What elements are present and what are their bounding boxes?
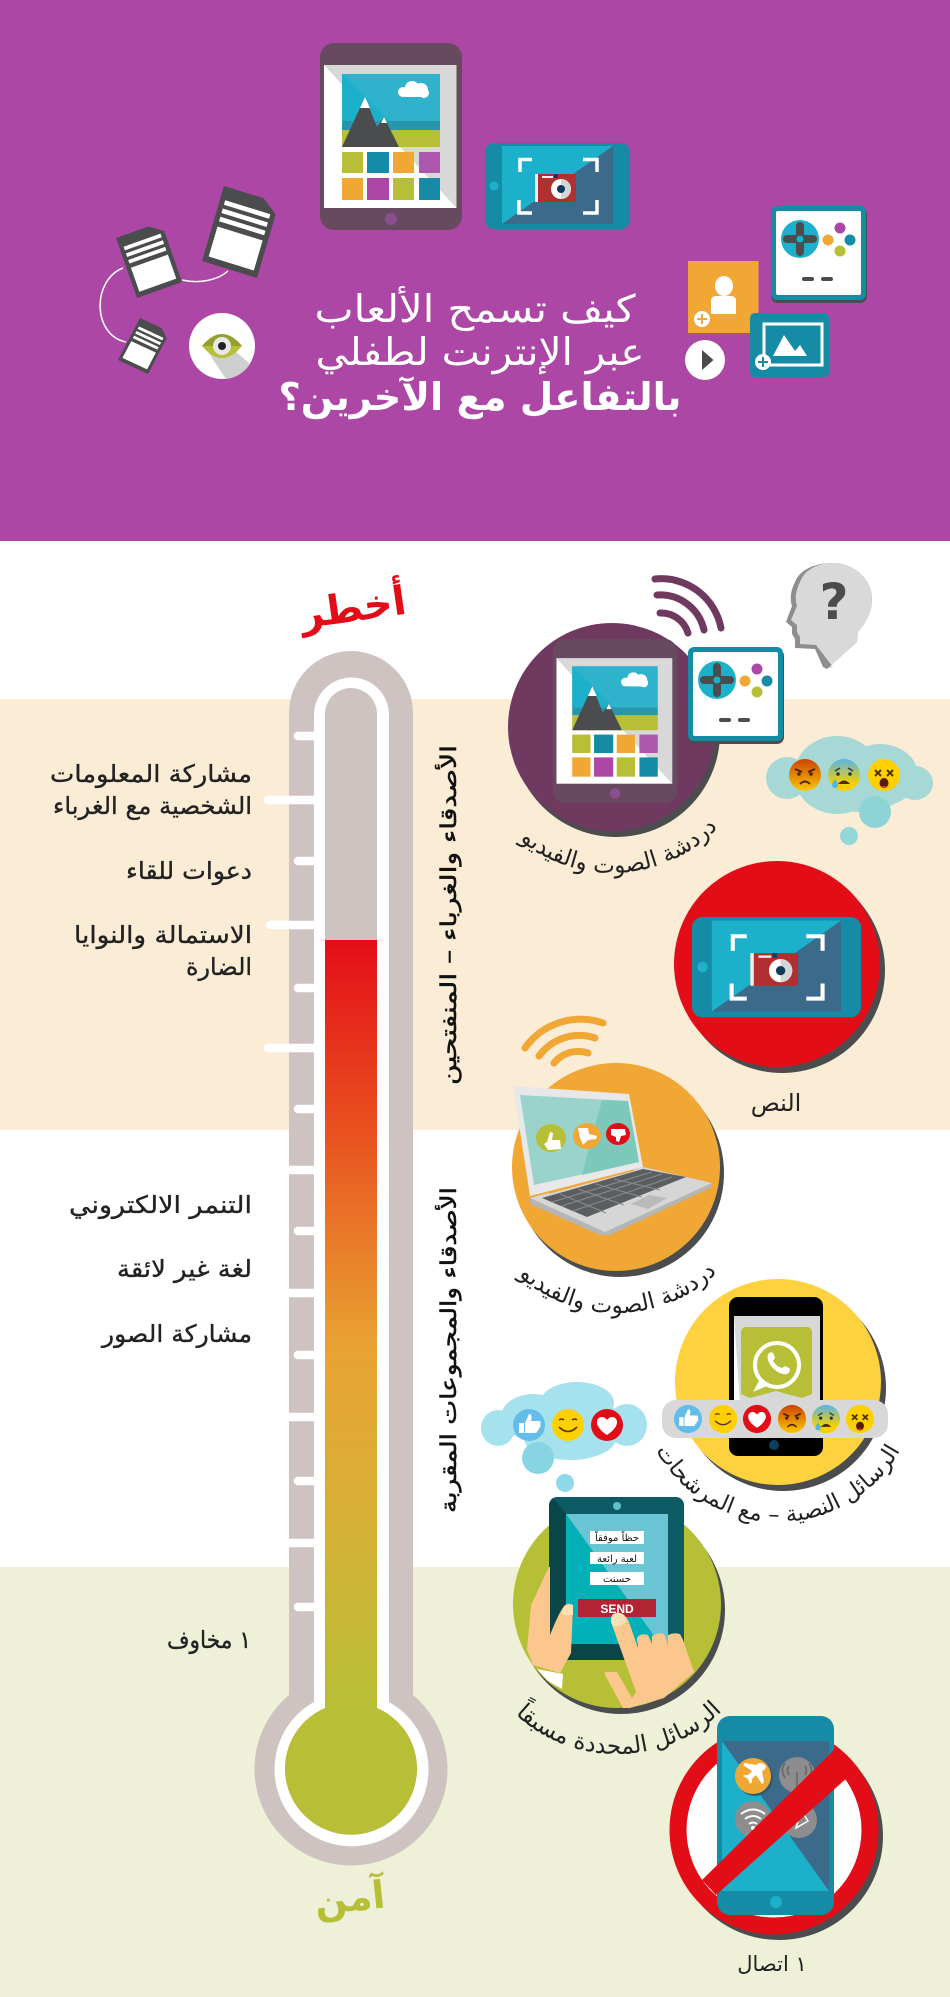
panel: predefined messages: [513, 1497, 725, 1714]
panel: no connection: [675, 1716, 883, 1940]
icon: tablet with send form: [549, 1497, 684, 1660]
icon: thinking head: ?: [819, 573, 849, 631]
icon: camera tablet: [485, 143, 630, 229]
icon: play button: [685, 340, 725, 380]
panel: filtered text messaging: [662, 1279, 888, 1491]
label: predefined messages: الرسائل المحددة مسبقاً: [518, 1697, 720, 1754]
icon: thinking head: [786, 563, 872, 669]
icon: game controller: [771, 206, 867, 303]
prohibition slash: [702, 1748, 858, 1895]
label: voice and video chat: دردشة الصوت والفيديو: [516, 824, 716, 879]
thermometer fluid: [285, 688, 417, 1835]
title: عبر الإنترنت لطفلي: [316, 330, 644, 375]
icon: tablet with send form: لعبة رائعة: [597, 1554, 637, 1565]
panel: laptop chat: [512, 1063, 724, 1277]
icon: eye: [189, 313, 255, 379]
icon: phone with whatsapp: [729, 1297, 823, 1456]
icon: wifi orange: [525, 1019, 603, 1063]
panel: text camera tablet: [674, 861, 885, 1073]
panel: voice and video chat tablet: [508, 623, 784, 837]
title: بالتفاعل مع الآخرين؟: [278, 375, 682, 419]
risk list: [50, 760, 252, 1654]
label: voice and video chat 2: دردشة الصوت والفيديو: [514, 1268, 714, 1319]
title: كيف تسمح الألعاب: [314, 285, 636, 332]
risk list: مشاركة الصور: [101, 1320, 252, 1348]
icon: phone: [717, 1716, 834, 1915]
risk list: ١ مخاوف: [167, 1626, 251, 1654]
icon: wifi purple: [655, 579, 721, 633]
label: most dangerous: أخطر: [295, 574, 409, 639]
icon: thought cloud negative emojis: [766, 736, 933, 845]
risk list: لغة غير لائقة: [117, 1255, 252, 1283]
icon: thought cloud positive emojis: [481, 1382, 647, 1492]
risk list: الضارة: [186, 953, 252, 981]
title: [278, 285, 682, 419]
reaction bar: [662, 1400, 888, 1438]
risk list: الشخصية مع الغرباء: [53, 792, 252, 820]
icon: tablet with send form: SEND: [600, 1602, 634, 1616]
label: one connection: ١ اتصال: [737, 1952, 807, 1976]
icon: tablet with send form: حسنت: [603, 1574, 631, 1585]
label: safe: آمن: [312, 1870, 388, 1924]
icon: tablet with photo gallery: [320, 43, 462, 230]
icon: tablet with send form: حظاً موفقاً: [595, 1530, 639, 1544]
icon: hands: [527, 1567, 694, 1708]
risk list: التنمر الالكتروني: [69, 1191, 252, 1219]
vertical label: friends and close groups: الأصدقاء والمجموعات المقربة: [435, 1187, 462, 1513]
thermometer: [254, 651, 448, 1865]
risk list: الاستمالة والنوايا: [74, 921, 252, 949]
risk list: دعوات للقاء: [126, 857, 252, 885]
label: text: النص: [751, 1089, 801, 1117]
icon: add picture: [750, 313, 829, 377]
panel: header: [0, 0, 950, 541]
ticks: [268, 736, 320, 1607]
icon: laptop: [513, 1086, 712, 1235]
risk list: مشاركة المعلومات: [50, 760, 252, 788]
icon: add person: [688, 261, 758, 333]
vertical label: friends and strangers: الأصدقاء والغرباء – المنفتحين: [435, 745, 462, 1085]
label: filtered text messages: الرسائل النصية – مع المرشحات: [658, 1444, 899, 1524]
icon: connected documents: [100, 186, 279, 374]
